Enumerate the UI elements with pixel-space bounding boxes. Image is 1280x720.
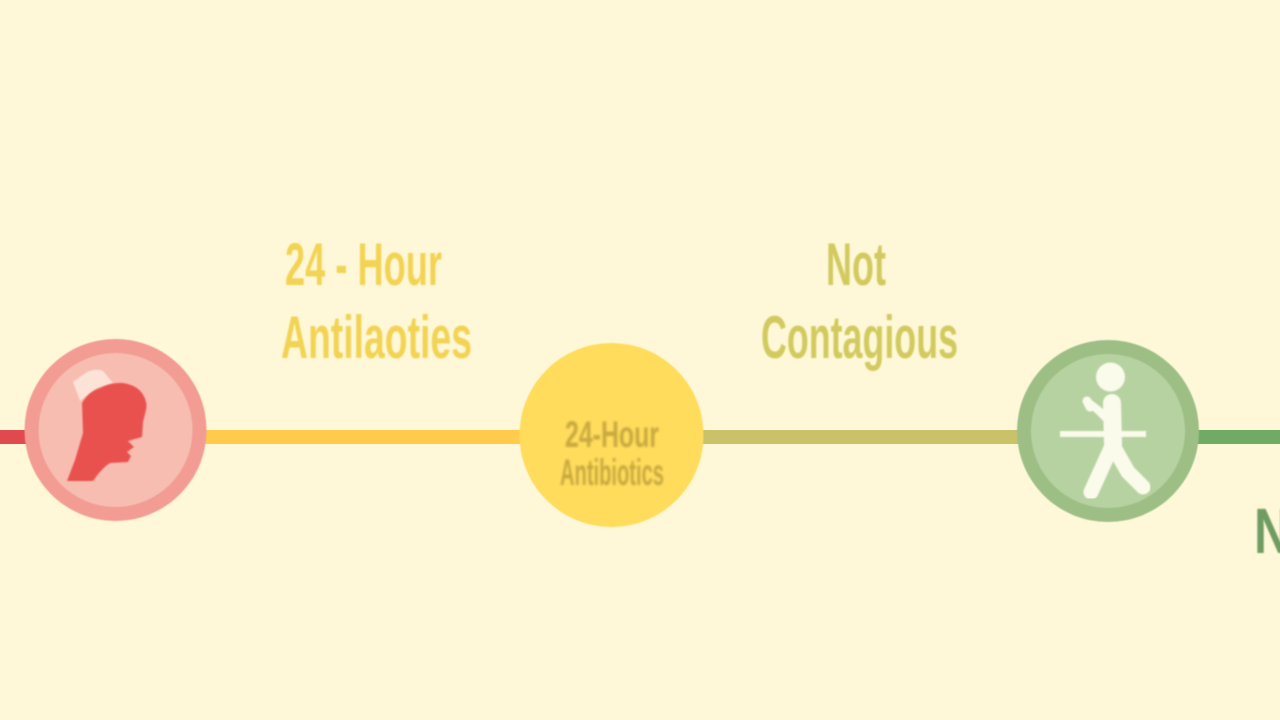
timeline segment: yellow	[200, 430, 525, 444]
figure torso	[1112, 403, 1113, 444]
figure leg left	[1091, 446, 1112, 492]
figure leg right	[1112, 444, 1143, 487]
node disc	[520, 343, 704, 527]
timeline segment: red	[0, 430, 30, 444]
icon: head silhouette	[67, 383, 146, 481]
node fill	[38, 353, 192, 507]
node label: 24-Hour	[565, 414, 659, 455]
node label	[560, 414, 664, 493]
timeline segment: green	[1195, 430, 1280, 444]
heading: 24-Hour Antibiotics	[281, 231, 472, 371]
node: walking person	[1017, 340, 1199, 522]
figure head	[1096, 362, 1125, 392]
heading: 24-Hour Antibiotics: Antilaoties	[281, 304, 472, 371]
heading: 24-Hour Antibiotics: 24 - Hour	[285, 231, 442, 298]
heading: Not Contagious	[761, 231, 958, 371]
node: sick person	[24, 339, 206, 521]
node label: Antibiotics	[560, 452, 664, 493]
icon: walking figure	[1060, 362, 1146, 492]
timeline segment: olive	[698, 430, 1023, 444]
node ring	[1017, 340, 1199, 522]
node: antibiotics	[520, 343, 704, 527]
icon: hood highlight	[73, 370, 113, 401]
node ring	[24, 339, 206, 521]
figure arm	[1089, 403, 1106, 418]
heading: Not Contagious: Not	[826, 231, 886, 298]
node fill	[1031, 354, 1185, 508]
figure hand	[1087, 401, 1090, 407]
figure crossbar	[1060, 431, 1146, 437]
heading: Not Contagious: Contagious	[761, 304, 958, 371]
